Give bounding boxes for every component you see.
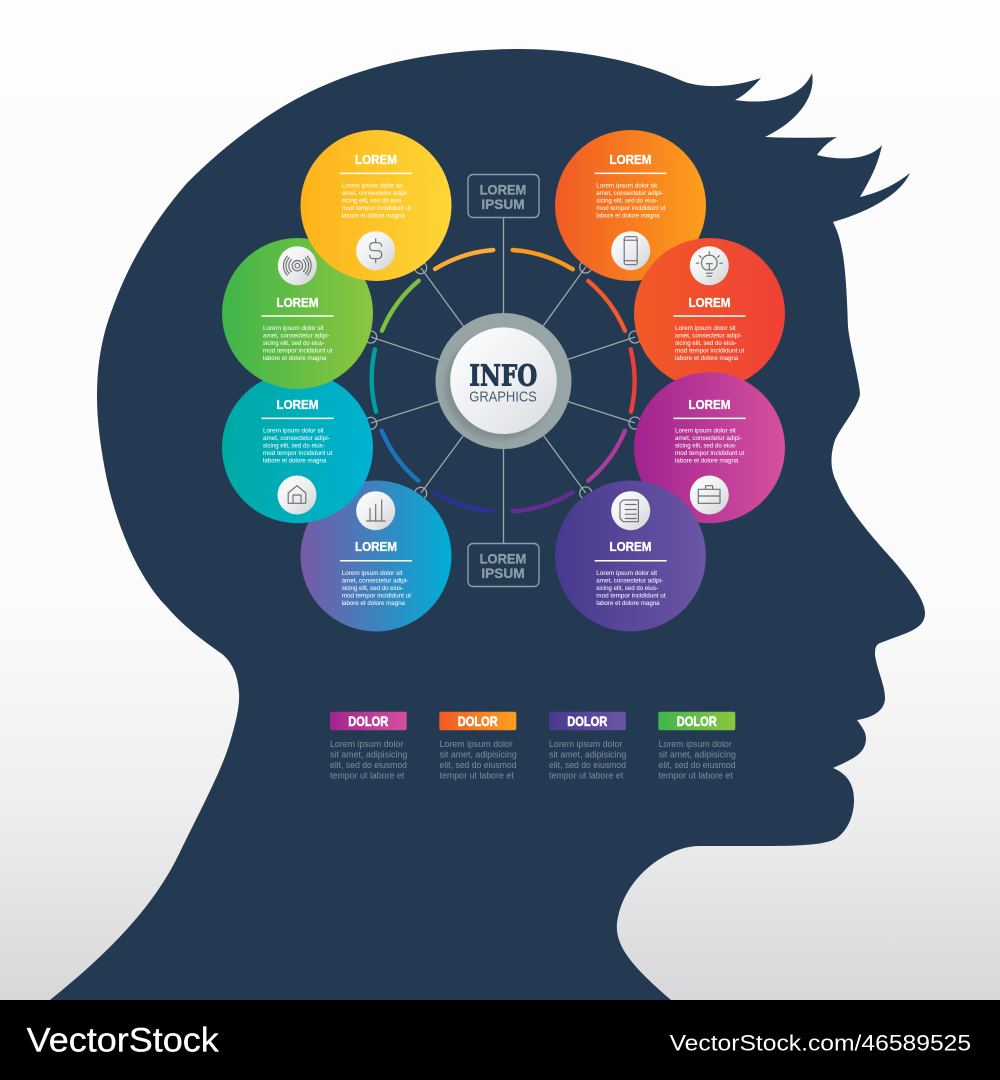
- legend item: purple: [549, 712, 626, 780]
- legend item: orange: DOLOR: [458, 714, 498, 729]
- legend item: magenta: elit, sed do eiusmod: [330, 759, 407, 770]
- legend item: magenta: [330, 712, 407, 780]
- panel: yellow circle: mod tempor incididunt ut: [342, 205, 411, 212]
- label box: bottom: LOREM: [480, 550, 526, 566]
- panel: magenta circle: LOREM: [688, 397, 730, 412]
- panel: purple circle: sicing elit, sed do eius-: [596, 585, 658, 592]
- panel: blue-violet circle: Lorem ipsum dolor sit: [342, 570, 403, 577]
- segmented ring: [372, 250, 635, 511]
- legend item: magenta: Lorem ipsum dolor: [330, 738, 403, 749]
- legend item: purple: sit amet, adipisicing: [549, 748, 626, 760]
- panel: orange circle: labore et dolore magna: [596, 212, 660, 219]
- legend item: orange: [439, 712, 517, 780]
- label box: top: [468, 174, 539, 218]
- legend item: magenta: tempor ut labore et: [330, 770, 405, 780]
- legend item: orange: tempor ut labore et: [440, 770, 514, 780]
- panel: red circle: sicing elit, sed do eius-: [675, 340, 737, 347]
- panel: orange circle: sicing elit, sed do eius-: [596, 197, 658, 204]
- label box: top: LOREM: [480, 181, 526, 197]
- panel: yellow circle: Lorem ipsum dolor sit: [342, 182, 403, 190]
- icon: bar chart: [356, 491, 395, 530]
- panel: blue-violet circle: labore et dolore magna: [342, 600, 405, 607]
- legend item: green: tempor ut labore et: [658, 770, 733, 780]
- legend item: green: Lorem ipsum dolor: [658, 738, 732, 749]
- footer bar: [0, 1000, 1000, 1080]
- panel: blue-violet circle: sicing elit, sed do eius-: [342, 585, 403, 592]
- legend item: magenta: DOLOR: [348, 714, 389, 729]
- legend item: green: elit, sed do eiusmod: [658, 759, 736, 770]
- panel: magenta circle: sicing elit, sed do eius-: [675, 442, 737, 449]
- icon: house: [278, 476, 316, 514]
- panel: teal circle: labore et dolore magna: [263, 457, 327, 464]
- label box: bottom: IPSUM: [481, 565, 525, 581]
- panel: red circle: amet, consectetur adipi-: [675, 333, 742, 340]
- panel: blue-violet circle: mod tempor incididunt ut: [342, 592, 411, 599]
- panel: red circle: mod tempor incididunt ut: [675, 348, 744, 355]
- subtitle: GRAPHICS: GRAPHICS: [469, 390, 537, 406]
- panel: purple circle: LOREM: [610, 539, 652, 554]
- legend item: orange: Lorem ipsum dolor: [440, 738, 513, 749]
- panel: teal circle: amet, consectetur adipi-: [263, 435, 330, 442]
- panel: green circle: sicing elit, sed do eius-: [263, 340, 325, 347]
- panel: purple circle: labore et dolore magna: [596, 600, 660, 607]
- legend item: green: [658, 712, 736, 780]
- panel: purple circle: Lorem ipsum dolor sit: [596, 570, 657, 577]
- panel: magenta circle: Lorem ipsum dolor sit: [675, 428, 736, 434]
- panel: green circle: Lorem ipsum dolor sit: [263, 325, 324, 332]
- icon: document: [611, 491, 650, 530]
- panel: green circle: amet, consectetur adipi-: [263, 333, 330, 340]
- title: INFO: INFO: [469, 359, 537, 393]
- center badge: [436, 313, 572, 449]
- panel: green circle: mod tempor incididunt ut: [263, 348, 332, 355]
- panel: yellow circle: sicing elit, sed do eius-: [342, 197, 403, 204]
- panel: teal circle: Lorem ipsum dolor sit: [263, 428, 324, 434]
- panel: teal circle: mod tempor incididunt ut: [263, 450, 332, 457]
- panel: orange circle: mod tempor incididunt ut: [596, 205, 666, 212]
- panel: magenta circle: mod tempor incididunt ut: [675, 450, 744, 457]
- panel: teal circle: LOREM: [276, 397, 318, 412]
- panel: orange circle: [555, 130, 706, 281]
- icon: briefcase: [690, 476, 729, 514]
- label box: bottom: [468, 544, 539, 586]
- icon: light bulb: [690, 246, 729, 285]
- panel: yellow circle: LOREM: [355, 152, 397, 167]
- panel: purple circle: [555, 480, 706, 632]
- panel: magenta circle: labore et dolore magna: [675, 457, 739, 464]
- legend item: orange: elit, sed do eiusmod: [440, 759, 516, 770]
- panel: purple circle: mod tempor incididunt ut: [596, 592, 666, 599]
- legend item: green: sit amet, adipisicing: [658, 748, 736, 760]
- legend item: purple: DOLOR: [567, 714, 608, 729]
- legend item: magenta: sit amet, adipisicing: [330, 748, 407, 760]
- panel: blue-violet circle: [300, 480, 452, 632]
- panel: magenta circle: amet, consectetur adipi-: [675, 435, 742, 442]
- panel: green circle: labore et dolore magna: [263, 355, 327, 362]
- panel: orange circle: amet, consectetur adipi-: [596, 190, 663, 197]
- legend item: purple: elit, sed do eiusmod: [549, 759, 626, 770]
- icon: broadcast signal: [278, 246, 317, 285]
- panel: purple circle: amet, consectetur adipi-: [596, 578, 663, 584]
- panel: red circle: [634, 238, 785, 389]
- panel: red circle: Lorem ipsum dolor sit: [675, 325, 736, 332]
- legend item: orange: sit amet, adipisicing: [440, 748, 517, 760]
- footer url: VectorStock.com/46589525: [670, 1031, 971, 1056]
- head silhouette: [50, 49, 925, 1000]
- panel: yellow circle: labore et dolore magna: [342, 212, 405, 219]
- panel: yellow circle: [300, 130, 452, 281]
- panel: teal circle: sicing elit, sed do eius-: [263, 442, 325, 449]
- panel: green circle: LOREM: [276, 295, 318, 310]
- panel: green circle: [222, 238, 373, 389]
- panel: magenta circle: [634, 372, 785, 523]
- panel: teal circle: [222, 372, 373, 523]
- icon: smartphone: [611, 231, 650, 270]
- panel: blue-violet circle: LOREM: [355, 539, 397, 554]
- panel: yellow circle: amet, consectetur adipi-: [342, 190, 408, 197]
- legend item: purple: tempor ut labore et: [549, 770, 624, 780]
- panel: orange circle: Lorem ipsum dolor sit: [596, 182, 657, 190]
- label box: top: IPSUM: [481, 196, 525, 212]
- legend item: green: DOLOR: [677, 714, 717, 729]
- connector lines and nodes: [365, 217, 641, 543]
- footer brand: VectorStock: [27, 1021, 220, 1059]
- panel: blue-violet circle: amet, consectetur adipi-: [342, 578, 408, 584]
- panel: red circle: LOREM: [688, 295, 730, 310]
- icon: dollar: [356, 231, 395, 270]
- panel: red circle: labore et dolore magna: [675, 355, 739, 362]
- panel: orange circle: LOREM: [610, 152, 652, 167]
- legend item: purple: Lorem ipsum dolor: [549, 738, 622, 749]
